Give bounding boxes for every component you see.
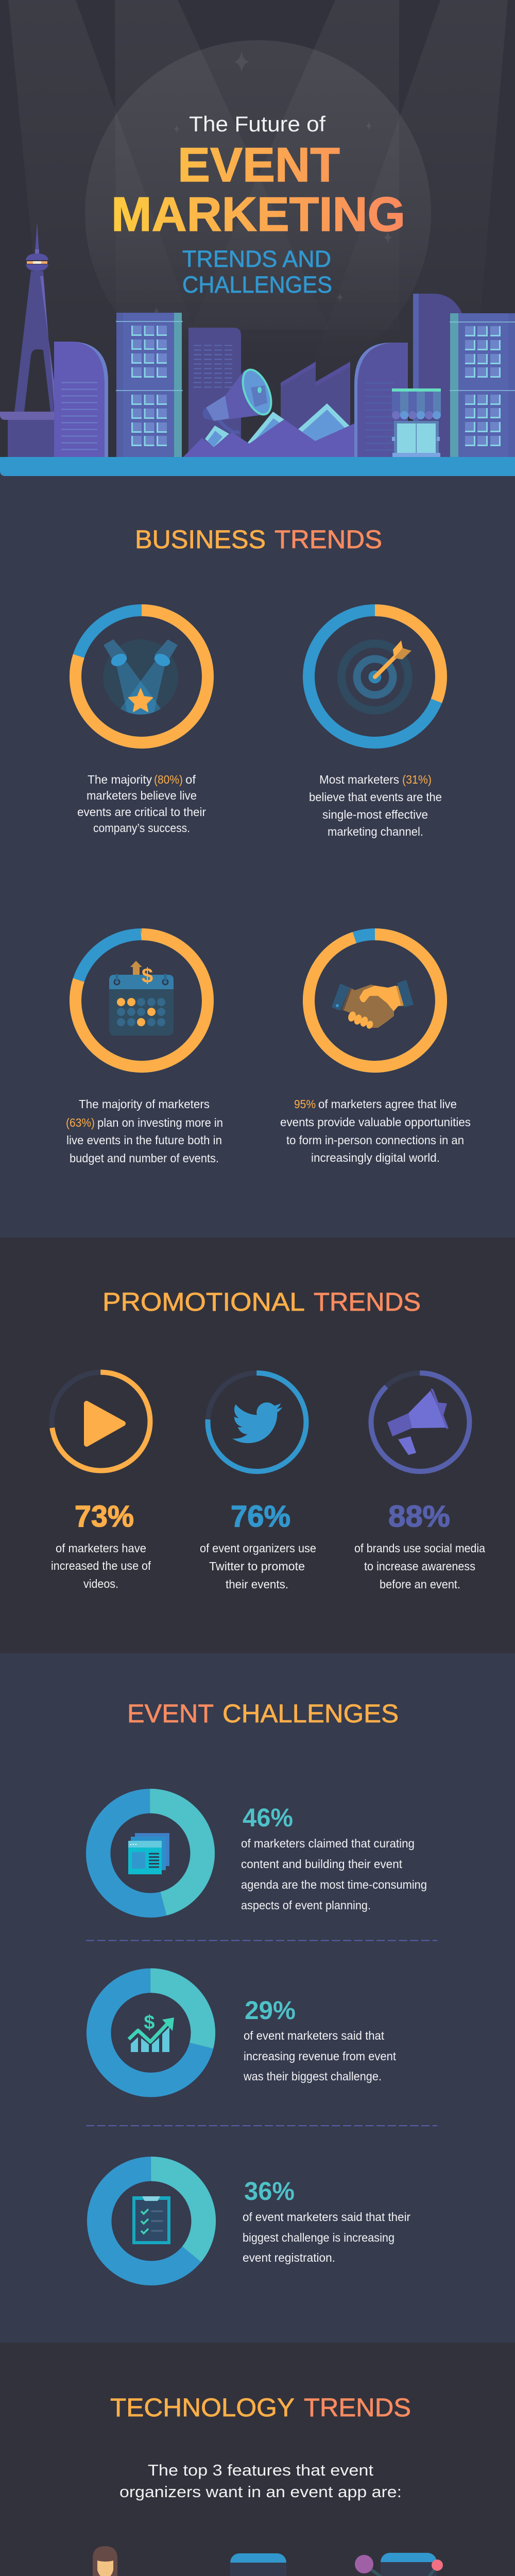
text: 80 percent	[77, 773, 206, 835]
text: 95 percent: events provide valuable opportunities	[280, 1115, 471, 1129]
icon: handshake	[332, 980, 414, 1030]
stat: 88 percent: before an event.	[380, 1578, 460, 1591]
stat: 76 percent: of event organizers use	[200, 1541, 316, 1555]
icon: spotlights and star	[103, 639, 178, 721]
text: 46 percent	[241, 1803, 427, 1912]
text: 63 percent	[66, 1097, 223, 1165]
illustration: curved building right	[354, 343, 408, 457]
heading: event challenges: EVENT	[127, 1699, 214, 1728]
text: 95 percent	[280, 1097, 471, 1164]
stat: 73 percent	[51, 1500, 151, 1590]
text: 63 percent: The majority of marketers	[79, 1097, 210, 1111]
illustration: tall building right	[413, 294, 462, 457]
icon: revenue chart: $	[144, 2012, 155, 2033]
donut chart: 36 percent	[99, 2169, 203, 2273]
stat: 76 percent: Twitter to promote	[209, 1560, 305, 1573]
text: 80 percent: of	[185, 773, 196, 786]
text: 31 percent: Most marketers	[319, 773, 399, 786]
title: TRENDS AND	[182, 246, 331, 272]
text: 29 percent: of event marketers said that	[244, 2029, 385, 2042]
text: 63 percent: budget and number of events.	[70, 1151, 219, 1165]
icon: content capture network	[355, 2553, 464, 2576]
text: 31 percent: marketing channel.	[328, 825, 423, 838]
text: 95 percent: 95%	[294, 1097, 316, 1111]
icon: onsite registration desk	[53, 2546, 155, 2576]
text: 46 percent: of marketers claimed that curating	[241, 1837, 415, 1850]
ring: 88 percent with megaphone icon	[371, 1373, 470, 1471]
heading: technology trends: TRENDS	[304, 2393, 411, 2422]
ground strip	[0, 457, 515, 476]
heading: business trends: BUSINESS	[135, 525, 266, 554]
text: 31 percent: (31%)	[402, 773, 432, 786]
text: 36 percent: of event marketers said that their	[243, 2210, 410, 2224]
text: 36 percent: 36%	[244, 2177, 295, 2206]
ring chart: 31 percent effective	[309, 610, 441, 743]
illustration: dark office block	[188, 328, 241, 457]
ring chart: 80 percent critical	[75, 610, 208, 743]
heading: event challenges	[127, 1699, 399, 1728]
spotlight beams	[8, 0, 508, 392]
stat: 73 percent: videos.	[83, 1577, 118, 1590]
text: 46 percent: content and building their event	[241, 1857, 403, 1871]
ring chart: 63 percent investing	[75, 935, 208, 1066]
donut chart: 46 percent	[98, 1801, 202, 1905]
stat: 88 percent	[354, 1500, 485, 1591]
illustration: curved building left	[54, 342, 108, 457]
icon: revenue chart	[129, 2012, 174, 2052]
stat: 88 percent: to increase awareness	[364, 1560, 475, 1573]
illustration: angled buildings	[281, 362, 350, 438]
icon: calendar and budget	[109, 961, 174, 1036]
heading: event challenges: CHALLENGES	[222, 1699, 399, 1728]
title: CHALLENGES	[182, 272, 332, 298]
ring: 76 percent with twitter icon	[208, 1373, 306, 1471]
text: 63 percent: live events in the future both in	[66, 1133, 222, 1147]
panel: promotional trends	[0, 1238, 515, 1653]
text: 80 percent: marketers believe live	[87, 789, 197, 802]
illustration: paper shapes and hills	[183, 403, 354, 457]
text: 80 percent: (80%)	[154, 773, 183, 786]
text: 63 percent: (63%)	[66, 1116, 95, 1129]
ground strip corner	[0, 471, 5, 476]
panel: event challenges	[0, 1653, 515, 2343]
illustration: tower	[0, 222, 54, 457]
panel: technology trends	[0, 2343, 515, 2576]
heading: technology trends	[110, 2393, 411, 2422]
icon: web pages	[128, 1833, 169, 1874]
title	[111, 112, 405, 298]
panel: business trends	[0, 476, 515, 1238]
text: 36 percent: biggest challenge is increasing	[243, 2231, 394, 2244]
text: 31 percent: believe that events are the	[309, 790, 442, 804]
stat: 73 percent: increased the use of	[51, 1559, 151, 1572]
stat: 76 percent: their events.	[226, 1578, 288, 1591]
heading: business trends: TRENDS	[274, 525, 382, 554]
text: 31 percent: single-most effective	[322, 808, 428, 821]
stars	[153, 50, 392, 316]
ring chart: 95 percent connections	[309, 935, 441, 1066]
heading: technology trends: TECHNOLOGY	[110, 2393, 295, 2422]
illustration: window tower right	[450, 313, 515, 457]
panel: header background	[0, 0, 515, 476]
text: 46 percent: 46%	[243, 1803, 293, 1832]
subheading: top 3 features: The top 3 features that event	[148, 2461, 373, 2479]
icon: calendar and budget: $	[142, 964, 153, 987]
subheading: top 3 features	[119, 2461, 402, 2501]
text: 36 percent	[243, 2177, 410, 2264]
stat: 76 percent: 76%	[231, 1500, 290, 1533]
heading: promotional trends	[102, 1287, 421, 1316]
text: 29 percent: 29%	[245, 1996, 296, 2025]
heading: promotional trends: PROMOTIONAL	[102, 1287, 305, 1316]
title: MARKETING	[111, 187, 405, 241]
ring: 73 percent with play icon	[52, 1372, 150, 1470]
text: 95 percent: of marketers agree that live	[318, 1097, 457, 1111]
stat: 88 percent: 88%	[388, 1500, 450, 1533]
subheading: top 3 features: organizers want in an event app are:	[119, 2483, 402, 2501]
heading: business trends	[135, 525, 382, 554]
text: 95 percent: increasingly digital world.	[311, 1151, 440, 1164]
icon: phone registration	[230, 2553, 293, 2576]
illustration: shop front	[392, 388, 441, 457]
title: EVENT	[178, 138, 340, 192]
stat: 73 percent: 73%	[75, 1500, 134, 1533]
text: 46 percent: aspects of event planning.	[241, 1899, 371, 1912]
icon: clipboard	[132, 2196, 170, 2244]
stat: 76 percent	[200, 1500, 316, 1591]
text: 29 percent: was their biggest challenge.	[243, 2070, 382, 2083]
moon circle	[85, 40, 431, 386]
illustration: window tower left	[116, 313, 183, 457]
text: 46 percent: agenda are the most time-consuming	[241, 1878, 427, 1891]
text: 80 percent: company’s success.	[93, 821, 190, 835]
icon: target and arrow	[341, 640, 411, 710]
text: 63 percent: plan on investing more in	[97, 1116, 223, 1129]
text: 31 percent	[309, 773, 442, 838]
donut chart: 29 percent	[99, 1980, 203, 2085]
heading: promotional trends: TRENDS	[314, 1287, 421, 1316]
text: 95 percent: to form in-person connections in an	[286, 1133, 464, 1147]
text: 80 percent: events are critical to their	[77, 805, 206, 819]
title: The Future of	[189, 112, 325, 136]
stat: 88 percent: of brands use social media	[354, 1541, 485, 1555]
illustration: megaphone	[202, 366, 277, 432]
text: 36 percent: event registration.	[243, 2251, 335, 2264]
stat: 73 percent: of marketers have	[56, 1541, 146, 1555]
text: 29 percent	[243, 1996, 397, 2083]
text: 80 percent: The majority	[88, 773, 152, 786]
text: 29 percent: increasing revenue from event	[244, 2049, 397, 2063]
